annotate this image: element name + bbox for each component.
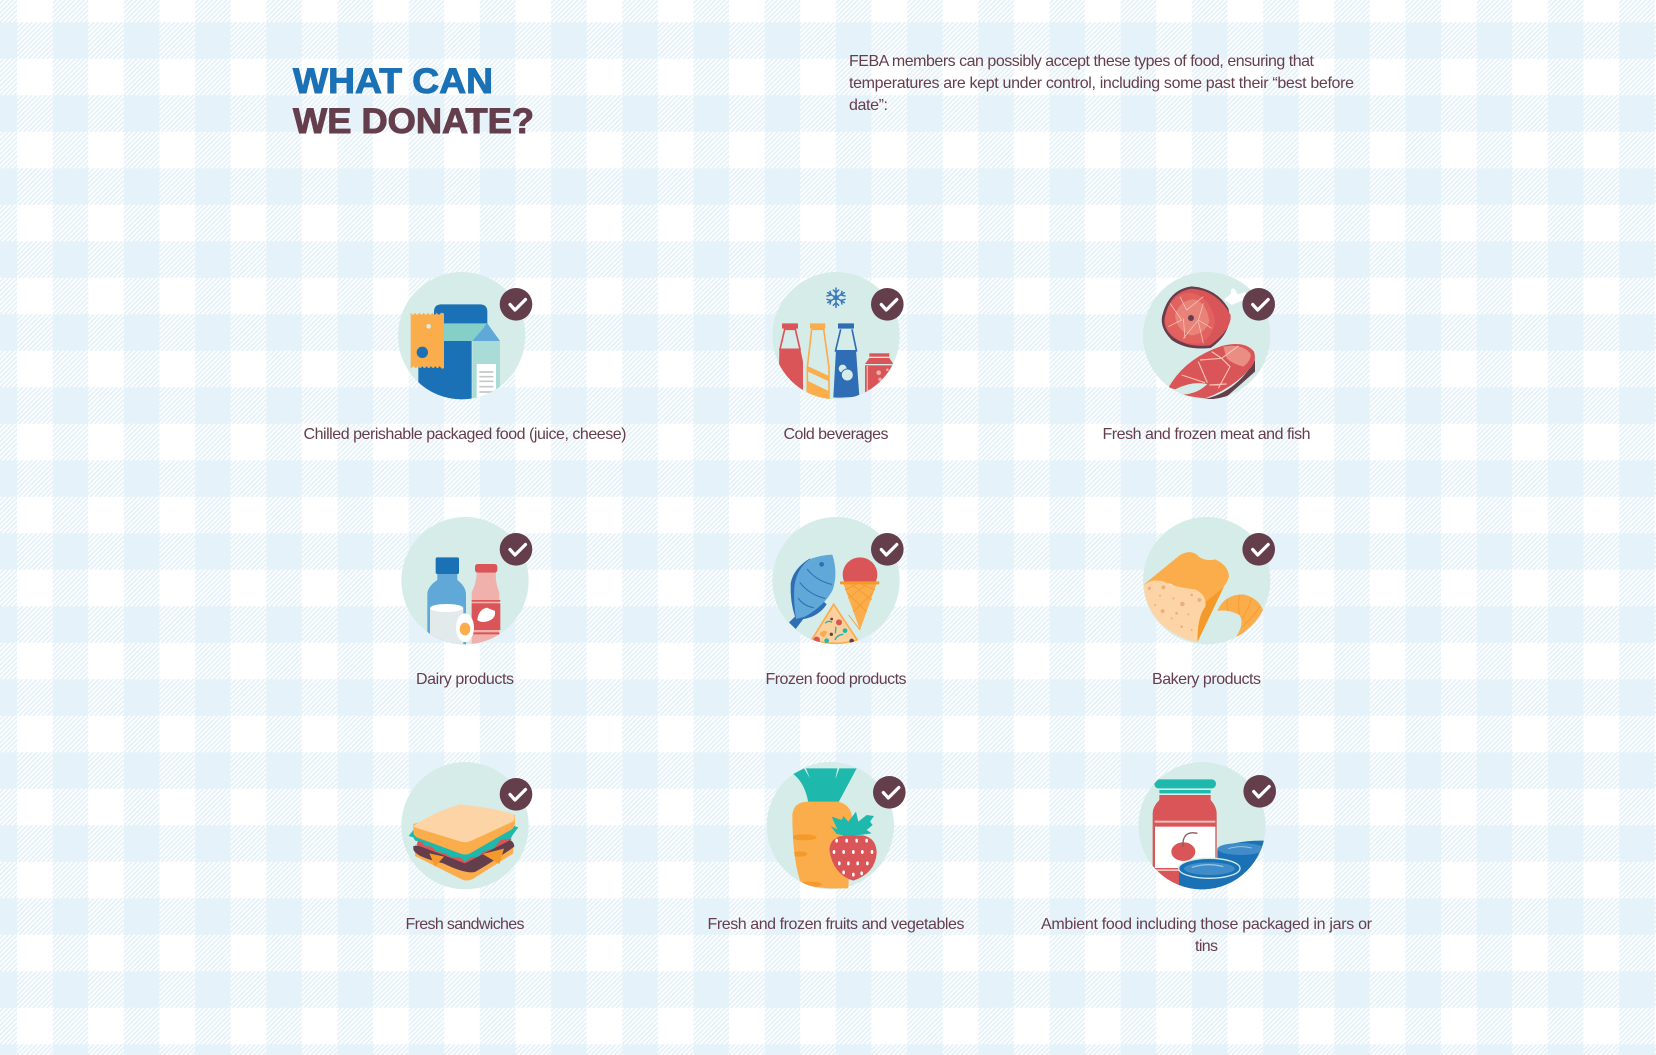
icon: jam jar and tins bbox=[1138, 762, 1266, 892]
label: Fresh and frozen meat and fish bbox=[1102, 426, 1310, 443]
panel: ambient food in jars or tins bbox=[1041, 762, 1373, 955]
label: Chilled perishable packaged food (juice, cheese) bbox=[304, 426, 626, 443]
label: Fresh and frozen fruits and vegetables bbox=[708, 916, 964, 933]
label: Fresh sandwiches bbox=[406, 916, 524, 933]
intro text: date”: bbox=[849, 97, 888, 114]
badge: check bbox=[1242, 533, 1275, 566]
label: Bakery products bbox=[1152, 671, 1261, 688]
panel: dairy products bbox=[401, 517, 532, 688]
icon: fish, ice cream, pizza bbox=[772, 517, 900, 644]
label: tins bbox=[1195, 938, 1218, 955]
badge: check bbox=[871, 288, 904, 321]
panel: frozen food products bbox=[766, 517, 906, 688]
label bbox=[1041, 916, 1373, 955]
panel: fresh and frozen fruits and vegetables bbox=[708, 762, 964, 933]
icon: sandwich bbox=[401, 762, 529, 889]
icon: carrot and strawberry bbox=[767, 762, 894, 889]
icon: carton and cheese bbox=[398, 272, 525, 403]
label: Dairy products bbox=[416, 671, 514, 688]
panel: cold beverages bbox=[772, 272, 904, 443]
panel: fresh and frozen meat and fish bbox=[1102, 272, 1310, 443]
intro text: FEBA members can possibly accept these types of food, ensuring that bbox=[849, 53, 1315, 70]
label: Cold beverages bbox=[784, 426, 888, 443]
badge: check bbox=[871, 533, 904, 566]
badge: check bbox=[873, 776, 906, 809]
badge: check bbox=[500, 533, 532, 566]
intro text: temperatures are kept under control, including some past their “best before bbox=[849, 75, 1354, 92]
label: Ambient food including those packaged in jars or bbox=[1041, 916, 1373, 933]
icon: bottles with snowflake bbox=[772, 272, 900, 402]
intro text bbox=[849, 53, 1354, 114]
title: WHAT CAN bbox=[293, 62, 493, 101]
label: Frozen food products bbox=[766, 671, 906, 688]
icon: bread and croissant bbox=[1143, 517, 1270, 644]
panel: fresh sandwiches bbox=[401, 762, 532, 933]
panel: bakery products bbox=[1143, 517, 1275, 688]
badge: check bbox=[500, 288, 532, 321]
badge: check bbox=[500, 778, 532, 811]
badge: check bbox=[1243, 775, 1276, 808]
icon: ham and salmon steak bbox=[1143, 272, 1270, 399]
title: WE DONATE? bbox=[293, 102, 534, 141]
title bbox=[293, 62, 534, 141]
icon: milk bottle, yoghurt drink, egg bbox=[401, 517, 529, 647]
panel: chilled perishable packaged food bbox=[304, 272, 626, 443]
badge: check bbox=[1242, 288, 1275, 321]
